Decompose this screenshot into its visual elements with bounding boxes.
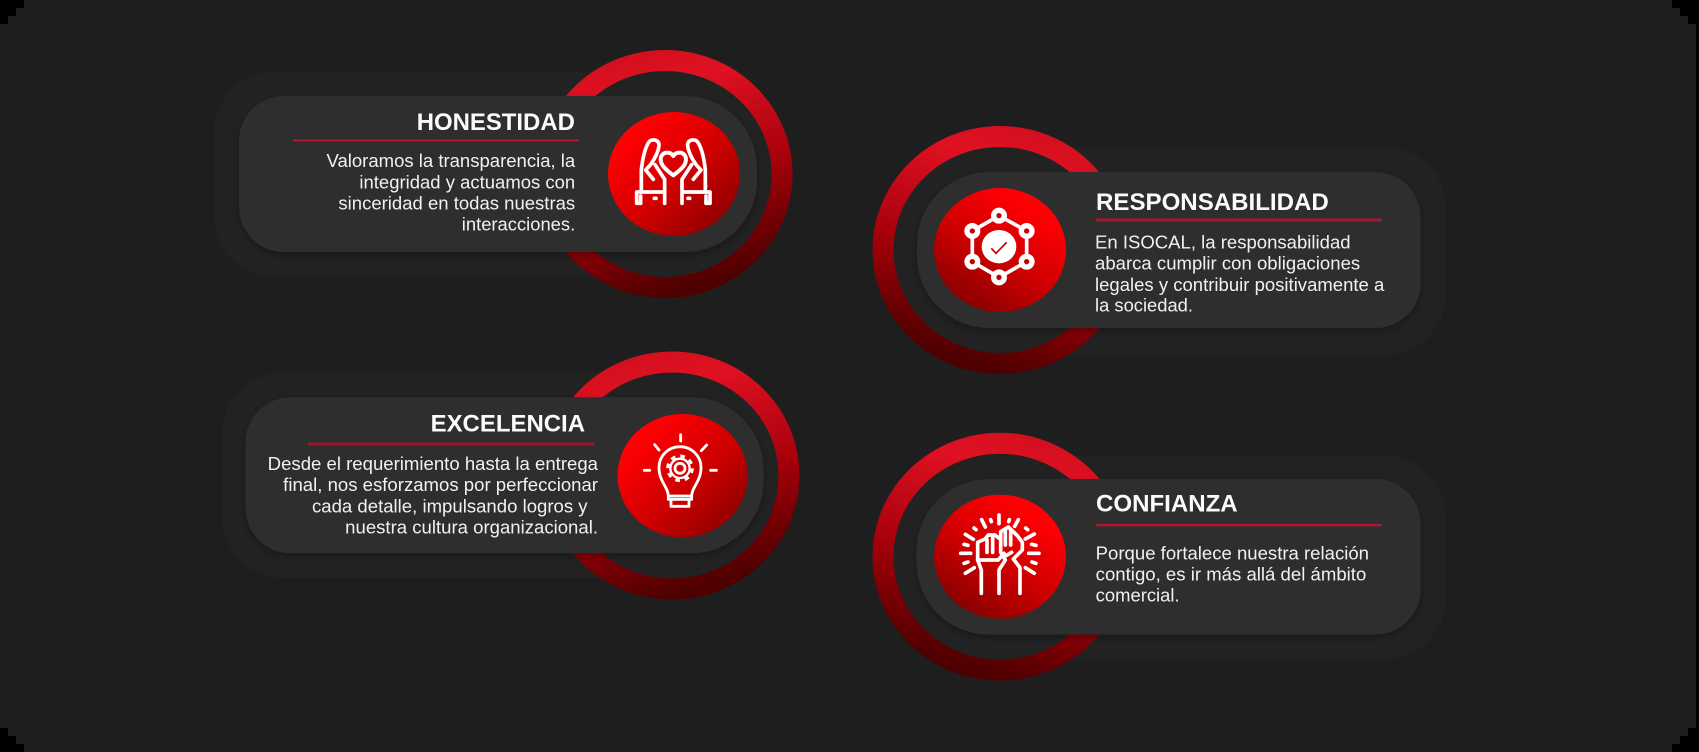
divider [1096,218,1382,222]
text block: nuestra cultura organizacional. [345,517,598,537]
card [916,479,1421,634]
text block: integridad y actuamos con [359,172,575,192]
red ring [883,443,1117,670]
text block: abarca cumplir con obligaciones [1095,254,1360,274]
divider [1096,524,1382,526]
red ring [883,136,1117,364]
text block: legales y contribuir positivamente a [1095,275,1385,295]
text block: la sociedad. [1095,295,1193,315]
halo [905,456,1446,659]
text block: interacciones. [462,214,575,234]
red disc [608,112,740,236]
divider [293,139,579,142]
text block [1096,543,1369,606]
text block: Valoramos la transparencia, la [326,151,576,171]
red disc [934,495,1066,619]
text block [1095,232,1385,315]
icon: hands holding heart [637,140,710,203]
red ring [548,60,782,288]
text block [326,151,576,234]
panel: confianza [883,443,1446,670]
text block: cada detalle, impulsando logros y [312,496,588,516]
halo [222,373,742,578]
text block [268,454,599,537]
card [246,397,764,553]
heading: EXCELENCIA [431,411,585,438]
text block: sinceridad en todas nuestras [338,193,575,213]
icon: light bulb with gear [644,435,716,506]
panel: excelencia [222,362,789,589]
card [239,96,757,252]
red disc [618,414,748,537]
panel: responsabilidad [883,136,1446,364]
heading: HONESTIDAD [417,109,575,136]
icon: raised fists [961,515,1039,593]
halo [214,72,734,277]
text block: Desde el requerimiento hasta la entrega [268,454,599,474]
halo [905,147,1446,355]
text block: En ISOCAL, la responsabilidad [1095,232,1351,252]
panel: honestidad [214,60,782,288]
red disc [934,188,1066,312]
red ring [555,362,789,589]
text block: comercial. [1096,586,1180,606]
text block: final, nos esforzamos por perfeccionar [283,475,598,495]
card [917,172,1421,328]
divider [308,442,594,446]
heading: CONFIANZA [1096,491,1238,518]
heading: RESPONSABILIDAD [1096,189,1329,216]
text block: Porque fortalece nuestra relación [1096,543,1369,563]
icon: network with check [964,208,1035,285]
text block: contigo, es ir más allá del ámbito [1096,565,1366,585]
